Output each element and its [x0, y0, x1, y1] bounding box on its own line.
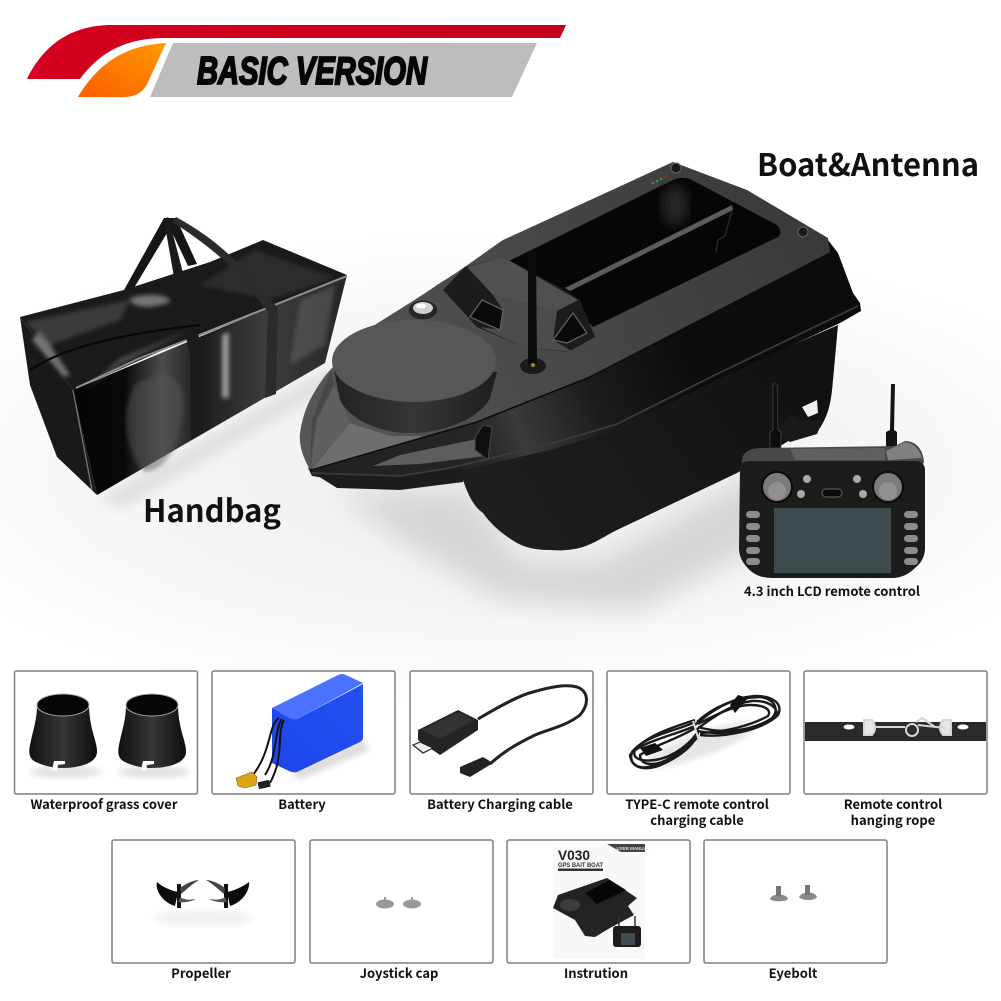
handbag illustration: [20, 217, 347, 510]
strap holes: [844, 724, 968, 730]
USB plug body: [418, 710, 478, 755]
bag far handle: [124, 218, 197, 290]
label: Eyebolt: [769, 963, 818, 982]
bow facet centre: [311, 385, 350, 468]
bag end face: [20, 317, 97, 495]
item: waterproof grass cover: [14, 671, 198, 813]
silver deck button: [408, 300, 438, 320]
subtitle strip: [558, 868, 603, 871]
cockpit roof: [467, 257, 578, 311]
remote shoulder: [742, 441, 924, 470]
metal rings and hook: [864, 718, 951, 736]
bag edge seam: [73, 390, 92, 490]
manual subtitle: GPS BAIT BOAT: [558, 862, 603, 869]
bumper clip: [475, 425, 492, 460]
bait boat illustration: [300, 162, 861, 610]
item: battery charging cable: [410, 671, 593, 813]
LCD screen: [774, 508, 891, 573]
propeller shadow: [153, 910, 253, 926]
plug: [730, 695, 748, 713]
user manual tab: [607, 844, 645, 852]
cockpit left window: [470, 300, 503, 330]
bag long side: [73, 275, 347, 495]
status LEDs: [652, 182, 654, 184]
tab text: USER MANUAL: [616, 846, 650, 851]
shoulder right key: [886, 442, 922, 460]
cockpit body face: [480, 295, 573, 352]
joysticks: [762, 472, 903, 502]
manual title: V030: [558, 847, 590, 863]
heading: Handbag: Handbag: [143, 486, 281, 531]
caption: remote control: 4.3 inch LCD remote control: [744, 581, 920, 600]
item: battery: [212, 671, 395, 813]
mini remote: [613, 916, 641, 947]
bag straps: [164, 217, 203, 440]
right antenna: [886, 384, 897, 448]
left propeller: [157, 880, 199, 908]
bag zipper: [76, 276, 347, 388]
bow facet left: [310, 370, 334, 468]
item: joystick cap: [310, 840, 493, 982]
USB plug metal: [413, 742, 433, 753]
bag ground shadow: [100, 368, 345, 510]
left cup: [29, 694, 101, 778]
label: TYPE-C remote control: [625, 794, 769, 813]
small connector: [258, 780, 271, 789]
label: Battery: [278, 794, 326, 813]
hull rim line: [312, 306, 858, 476]
round hatch: [332, 320, 497, 433]
deck front edge groove: [310, 253, 830, 470]
side keys: [746, 511, 918, 565]
label: Remote control: [844, 794, 942, 813]
banner red swoosh: [27, 25, 566, 79]
label: Battery Charging cable: [427, 794, 573, 813]
soft backdrop glow: [0, 230, 1001, 710]
bag sheen highlights: [25, 250, 335, 472]
boat antenna: [520, 250, 546, 374]
item: eyebolt: [704, 840, 887, 982]
cockpit right window: [553, 313, 587, 343]
bow under rim: [310, 466, 463, 490]
item: remote control hanging rope: [804, 671, 987, 829]
boat ground shadow: [340, 470, 770, 610]
banner title: BASIC VERSION: [197, 50, 428, 93]
item: TYPE-C charging cable: [607, 671, 790, 829]
caps: [376, 897, 421, 908]
boat side band: [308, 240, 861, 480]
tray inner far wall: [662, 185, 688, 225]
divider fin: [716, 210, 732, 252]
boat rear strut: [775, 415, 823, 442]
manual cover backdrop: [553, 845, 645, 959]
label: Joystick cap: [360, 963, 438, 982]
label: hanging rope: [851, 810, 935, 829]
small round buttons: [797, 475, 867, 498]
heading: Boat and Antenna: Boat&Antenna: [757, 140, 979, 185]
band forward highlight: [373, 439, 487, 466]
label: Instrution: [564, 963, 628, 982]
XT60 connector: [236, 772, 257, 788]
banner grey bar: [150, 43, 537, 97]
type-c head: [640, 743, 663, 756]
boat deck: [300, 162, 830, 470]
boat hull: [340, 325, 838, 550]
remote body: [739, 461, 925, 578]
item: instruction manual: [507, 840, 690, 982]
bag far strap line: [30, 325, 200, 370]
battery shadow: [290, 740, 370, 780]
cockpit dome: [443, 257, 595, 352]
strap band: [805, 722, 986, 741]
coil shadow: [640, 713, 760, 777]
tray corner screws: [652, 163, 808, 237]
cable tie: [693, 721, 699, 741]
label: Waterproof grass cover: [30, 794, 178, 813]
bait tray opening: [507, 178, 780, 327]
left antenna: [770, 384, 781, 448]
cockpit shell: [443, 257, 595, 352]
mini boat: [553, 878, 637, 937]
LCD remote control: [739, 384, 925, 578]
DC connector: [460, 757, 493, 777]
right cup: [118, 694, 190, 778]
label: Propeller: [171, 963, 231, 982]
battery top face: [272, 674, 363, 719]
USB port: [822, 489, 842, 497]
shoulder light panel: [790, 448, 885, 460]
bow facet right: [312, 423, 425, 469]
label: charging cable: [650, 810, 744, 829]
battery front face: [272, 684, 363, 772]
bolts: [770, 885, 817, 901]
right propeller: [206, 880, 249, 908]
cable loop: [478, 686, 586, 764]
banner orange leaf: [78, 43, 166, 97]
battery wires: [253, 718, 284, 783]
tray divider: [565, 205, 733, 291]
boat rear cutout: [802, 400, 818, 417]
USB plug top face: [422, 712, 474, 739]
coil loops: [630, 696, 779, 768]
bag near handle and strap: [172, 217, 278, 398]
header banner: [27, 25, 566, 97]
item: propeller: [112, 840, 295, 982]
bag top face: [20, 240, 347, 390]
